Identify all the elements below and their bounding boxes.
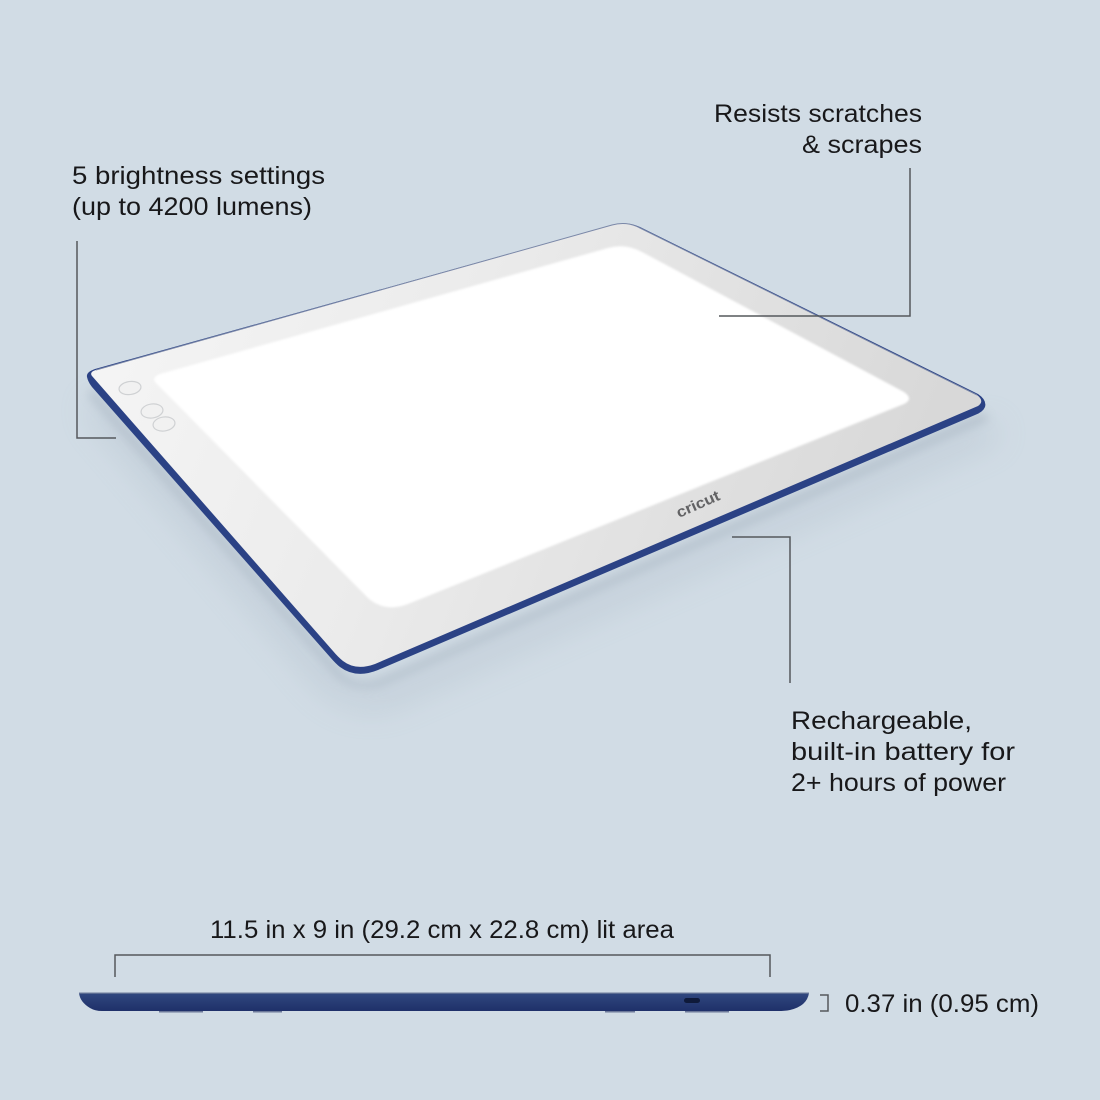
leader line: battery <box>732 537 790 683</box>
text: battery <box>791 707 1015 797</box>
callout: brightness <box>72 162 325 438</box>
bracket: thickness <box>820 995 828 1011</box>
text: brightness settings: 5 brightness settings <box>72 162 325 190</box>
text: battery: 2+ hours of power <box>791 769 1006 797</box>
leader line: brightness <box>77 241 116 438</box>
text: battery: built-in battery for <box>791 738 1015 766</box>
text: brightness settings <box>72 162 325 221</box>
lit area <box>154 246 909 607</box>
text: thickness: 0.37 in (0.95 cm) <box>845 990 1039 1018</box>
text: resists scratches <box>714 100 922 159</box>
bracket: lit area width <box>115 955 770 977</box>
logo: cricut <box>674 487 723 522</box>
text: lit area: 11.5 in x 9 in (29.2 cm x 22.8 cm) lit area <box>210 916 674 944</box>
icon: brightness buttons <box>118 380 176 432</box>
text: resists scratches: & scrapes <box>802 131 922 159</box>
leader line: scratches <box>719 168 910 316</box>
panel shadow <box>88 388 1000 708</box>
text: resists scratches: Resists scratches <box>714 100 922 128</box>
icon: charging port <box>684 998 700 1003</box>
text: battery: Rechargeable, <box>791 707 972 735</box>
panel side view <box>79 992 809 1012</box>
callout: battery <box>732 537 1015 797</box>
text: brightness settings: (up to 4200 lumens) <box>72 193 312 221</box>
side view dimensions <box>79 916 1039 1018</box>
panel blue edge <box>87 223 985 674</box>
panel upper rim <box>96 224 977 395</box>
callout: scratches <box>714 100 922 316</box>
light panel, 3D view <box>87 223 1000 708</box>
panel top face <box>91 224 981 667</box>
